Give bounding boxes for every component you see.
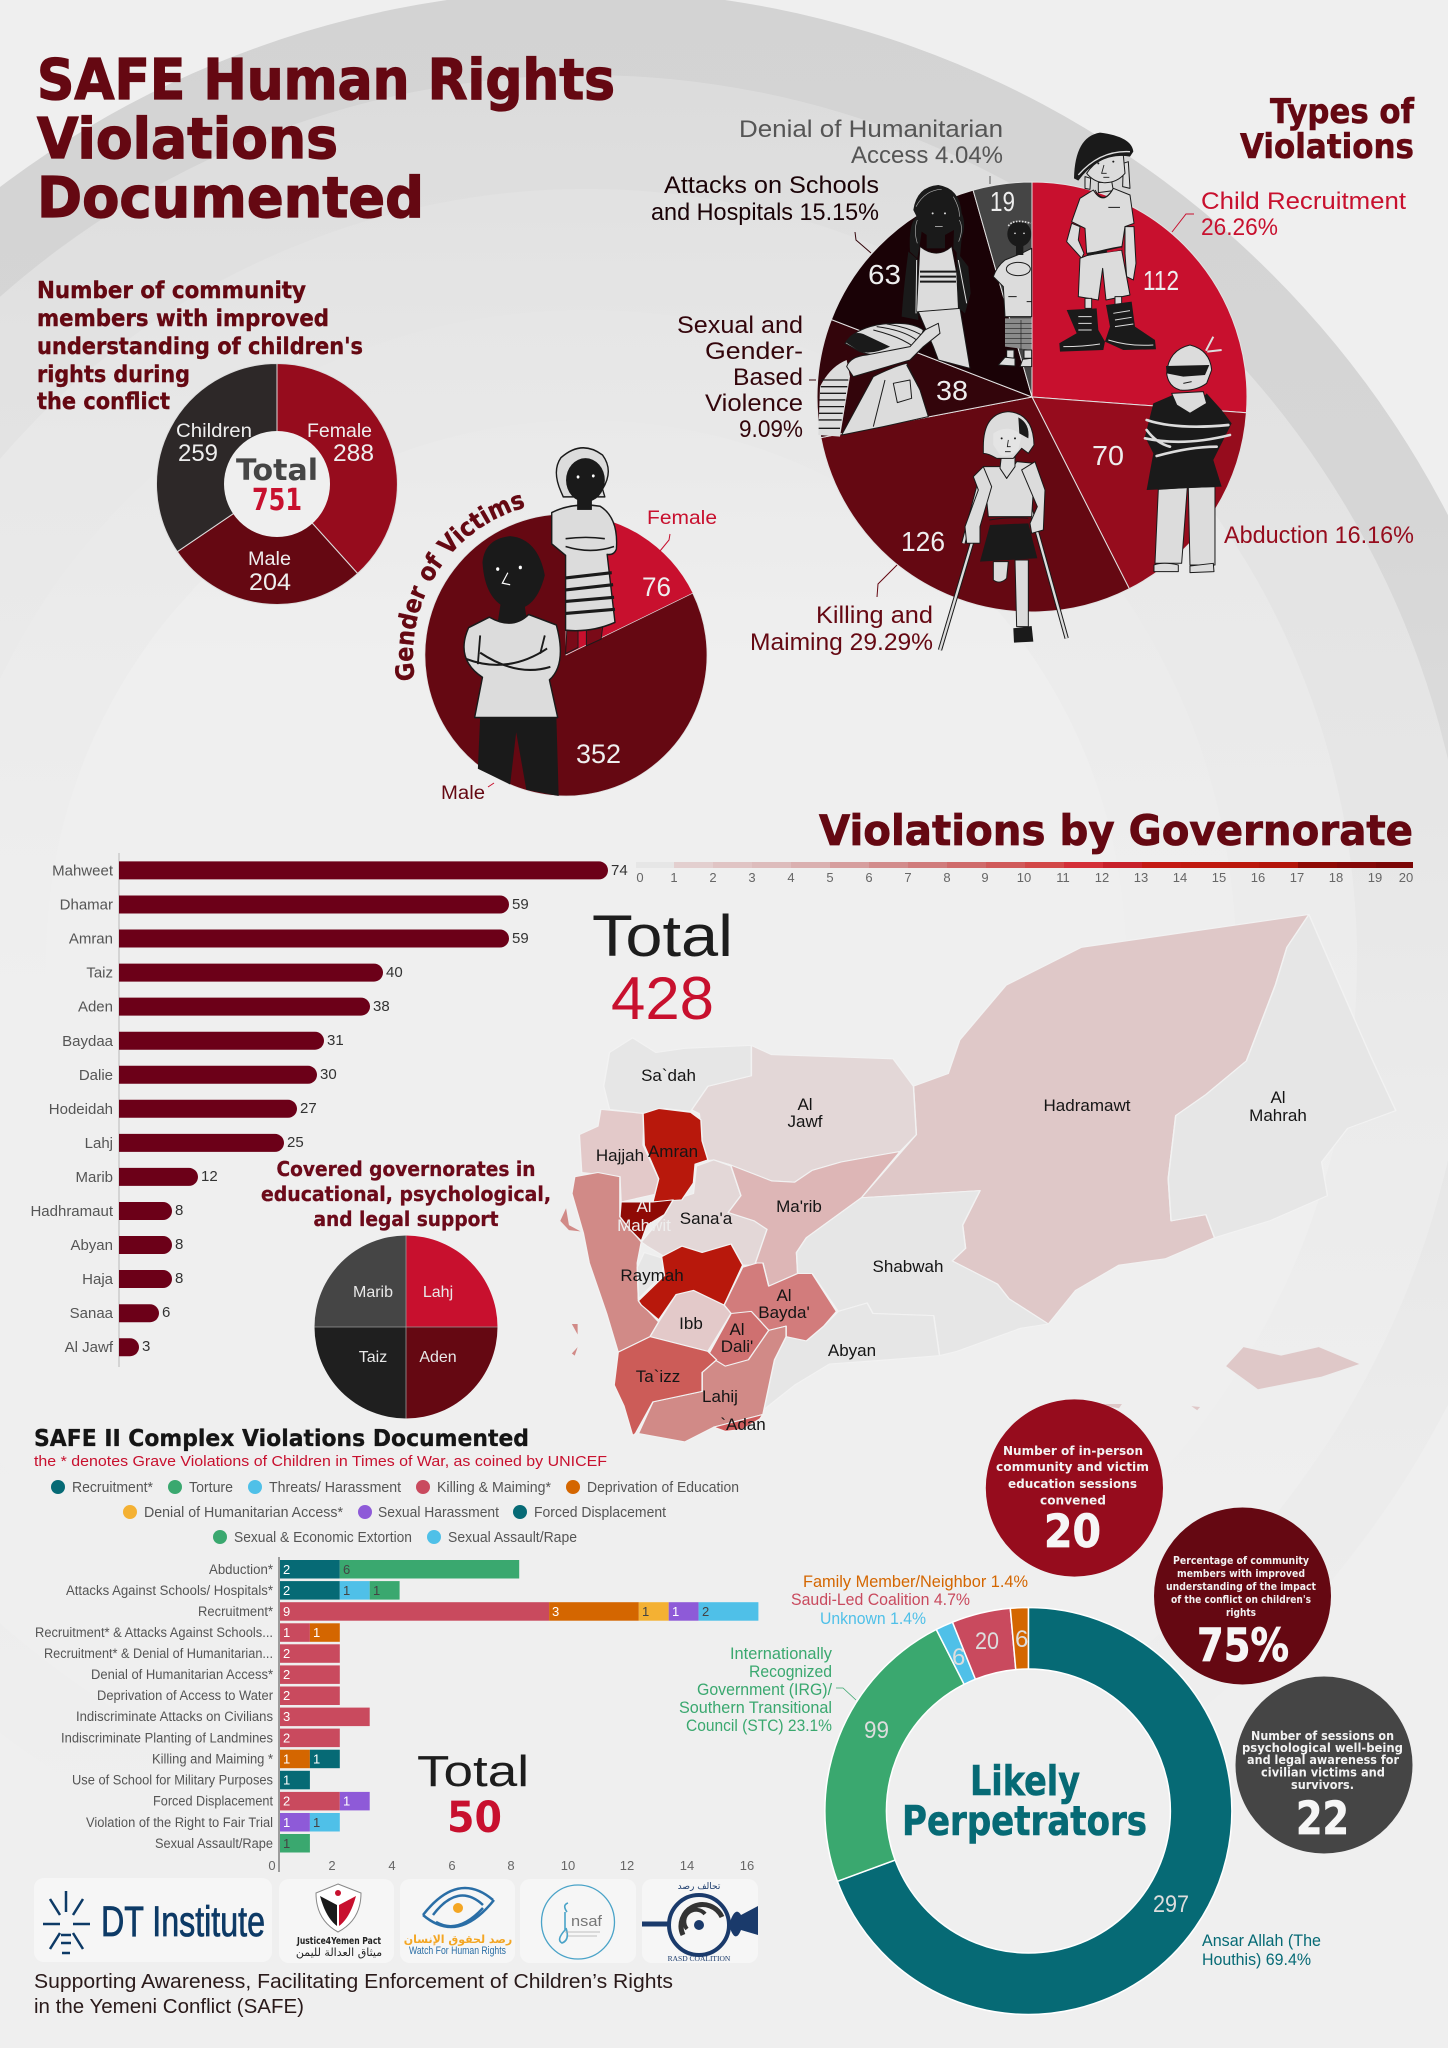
stacked bar chart: complex violations: Forced Displacement — [153, 1794, 273, 1808]
map of Yemen: Amran — [648, 1142, 698, 1161]
stat circle: improved understanding: 75% — [1197, 1619, 1289, 1672]
map legend: 15 — [1212, 870, 1226, 885]
stacked bar chart: complex violations: 1 — [313, 1752, 320, 1766]
stacked bar chart: complex violations: 1 — [313, 1625, 320, 1640]
label: denial of humanitarian access — [739, 116, 1003, 184]
map legend: 7 — [904, 870, 912, 885]
stat circle: improved understanding: understanding of the impact — [1166, 1580, 1316, 1593]
pie chart: covered governorates: Taiz — [359, 1349, 387, 1366]
legend: complex violations: Recruitment* — [72, 1479, 153, 1496]
footer project name — [34, 1971, 673, 2018]
icon: blindfolded boy — [1145, 337, 1232, 573]
heading: community members — [37, 278, 363, 415]
stacked bar chart: complex violations: Indiscriminate Attacks on Civilians — [76, 1709, 273, 1724]
total violations by governorate — [592, 904, 733, 1032]
stacked bar chart: complex violations: 1 — [283, 1752, 290, 1766]
bar chart: violations by governorate: 27 — [300, 1100, 317, 1117]
label: attacks on schools: Attacks on Schools — [664, 172, 879, 199]
map legend: 2 — [709, 870, 717, 885]
map of Yemen: Al — [636, 1197, 652, 1216]
stacked bar chart: complex violations: 14 — [680, 1858, 694, 1873]
heading: SAFE II complex violations — [34, 1426, 607, 1470]
stat circle: in-person sessions — [986, 1399, 1163, 1577]
map of Yemen: Sana'a — [680, 1209, 733, 1228]
pie chart: covered governorates: Marib — [353, 1284, 393, 1301]
logo: Insaf — [520, 1879, 636, 1963]
bar chart: violations by governorate: Lahj — [85, 1135, 113, 1152]
donut chart: community members: 288 — [333, 440, 374, 467]
stacked bar chart: complex violations: 9 — [283, 1604, 290, 1619]
perpetrator labels: Recognized — [749, 1662, 832, 1681]
stacked bar chart: complex violations: 2 — [283, 1646, 290, 1661]
heading: violations by governorate: Violations by Governorate — [819, 806, 1413, 855]
stacked bar chart: complex violations — [35, 1557, 758, 1873]
legend: complex violations: Threats/ Harassment — [269, 1479, 402, 1496]
logo: Justice4Yemen Pact — [279, 1879, 394, 1963]
heading: community members: understanding of children's — [37, 334, 363, 360]
perpetrator labels: Southern Transitional — [679, 1698, 832, 1717]
logo: RASD coalition: تحالف رصد — [678, 1882, 721, 1892]
total complex violations: Total — [417, 1747, 529, 1796]
heading: SAFE II complex violations: SAFE II Complex Violations Documented — [34, 1426, 529, 1452]
donut chart: likely perpetrators: Perpetrators — [902, 1797, 1147, 1845]
label: denial of humanitarian access: Denial of Humanitarian — [739, 116, 1003, 143]
heading: covered governorates — [261, 1157, 551, 1231]
stacked bar chart: complex violations: 0 — [268, 1858, 276, 1873]
legend: complex violations: Sexual Assault/Rape — [448, 1529, 577, 1546]
bar chart: violations by governorate: Taiz — [86, 964, 113, 982]
stat circle: in-person sessions: convened — [1040, 1493, 1106, 1508]
perpetrator labels: Government (IRG)/ — [697, 1680, 832, 1699]
icon: girl on crutches — [940, 412, 1067, 650]
stacked bar chart: complex violations: 4 — [388, 1858, 396, 1873]
bar chart: violations by governorate: 30 — [320, 1066, 337, 1083]
map of Yemen: Al — [776, 1286, 792, 1305]
stat circle: improved understanding: members with improved — [1177, 1567, 1305, 1580]
bar chart: violations by governorate: Hadhramaut — [30, 1203, 114, 1220]
bar chart: violations by governorate: Haja — [82, 1271, 114, 1288]
map of Yemen: Al — [1270, 1088, 1286, 1107]
bar chart: violations by governorate: 74 — [611, 862, 628, 879]
bar chart: violations by governorate: Baydaa — [62, 1033, 114, 1050]
map legend: 19 — [1368, 870, 1382, 885]
bar chart: violations by governorate: 38 — [373, 998, 390, 1015]
logo: RASD coalition — [642, 1879, 758, 1963]
stat circle: psychological sessions: and legal awareness for — [1247, 1753, 1399, 1767]
map legend: 13 — [1134, 870, 1148, 885]
bar chart: violations by governorate: 12 — [201, 1168, 218, 1185]
title: Violations — [37, 107, 338, 172]
map of Yemen — [560, 914, 1396, 1442]
stacked bar chart: complex violations: 1 — [283, 1836, 290, 1851]
donut chart: likely perpetrators: Likely — [970, 1757, 1080, 1805]
label: killing and maiming: Maiming 29.29% — [750, 629, 933, 656]
pie chart: types of violations: 63 — [868, 259, 901, 290]
bar chart: violations by governorate: Sanaa — [70, 1305, 114, 1322]
stacked bar chart: complex violations: Killing and Maiming * — [152, 1752, 274, 1766]
label: killing and maiming: Killing and — [816, 602, 933, 629]
footer project name: Supporting Awareness, Facilitating Enforcement of Children’s Rights — [34, 1971, 673, 1993]
heading: community members: the conflict — [37, 389, 170, 415]
donut chart: community members: 204 — [249, 569, 291, 596]
stacked bar chart: complex violations: 6 — [343, 1562, 350, 1577]
stacked bar chart: complex violations: Use of School for Military Purposes — [72, 1772, 273, 1788]
heading: community members: rights during — [37, 362, 190, 388]
map legend: 20 — [1399, 870, 1413, 885]
map of Yemen: Jawf — [788, 1112, 823, 1131]
legend: complex violations: Forced Displacement — [534, 1504, 667, 1521]
stacked bar chart: complex violations: 1 — [343, 1583, 350, 1598]
map of Yemen: Raymah — [620, 1266, 684, 1285]
donut chart: likely perpetrators: 20 — [975, 1628, 999, 1655]
donut chart: community members: Total — [236, 453, 318, 487]
map legend: 4 — [787, 870, 795, 885]
label: sexual and gender-based violence: Violence — [705, 390, 803, 417]
legend: complex violations: Sexual & Economic Extortion — [234, 1529, 412, 1546]
map of Yemen: Mahwit — [617, 1216, 671, 1235]
map legend: 5 — [826, 870, 834, 885]
stat circle: in-person sessions: education sessions — [1008, 1476, 1137, 1491]
perpetrator labels: Council (STC) 23.1% — [686, 1716, 832, 1735]
stat circle: psychological sessions: survivors. — [1291, 1778, 1354, 1792]
icon: girl with braids — [902, 185, 971, 368]
logo: Watch For Human Rights: رصد لحقوق الإنسان — [404, 1933, 512, 1946]
logo: Insaf: nsaf — [571, 1913, 603, 1930]
map of Yemen: Ibb — [679, 1314, 703, 1333]
pie chart: types of violations: 126 — [901, 526, 945, 557]
label: child recruitment: 26.26% — [1201, 214, 1278, 241]
map legend: 12 — [1095, 870, 1109, 885]
donut chart: likely perpetrators: 99 — [864, 1717, 889, 1744]
map legend: 10 — [1017, 870, 1031, 885]
stacked bar chart: complex violations: 2 — [283, 1583, 290, 1598]
label: sexual and gender-based violence — [677, 312, 816, 443]
donut chart: community members: 259 — [178, 440, 218, 467]
stacked bar chart: complex violations: 8 — [507, 1858, 515, 1873]
bar chart: violations by governorate: Aden — [78, 998, 113, 1016]
perpetrator labels: Internationally — [730, 1644, 832, 1663]
total complex violations — [417, 1747, 529, 1843]
pie chart: gender of victims: Female — [647, 508, 717, 529]
stat circle: improved understanding: Percentage of community — [1173, 1554, 1309, 1567]
legend: complex violations: Deprivation of Education — [587, 1479, 739, 1496]
stat circle: improved understanding: of the conflict on children's — [1171, 1593, 1311, 1606]
stacked bar chart: complex violations: Indiscriminate Planting of Landmines — [61, 1730, 273, 1746]
stacked bar chart: complex violations: Sexual Assault/Rape — [155, 1836, 273, 1851]
map of Yemen: Ma'rib — [776, 1197, 822, 1216]
stat circle: in-person sessions: 20 — [1044, 1505, 1101, 1558]
label: denial of humanitarian access: Access 4.04% — [851, 142, 1003, 169]
stacked bar chart: complex violations: 16 — [740, 1858, 754, 1873]
map of Yemen: Hajjah — [596, 1146, 644, 1165]
stacked bar chart: complex violations: 2 — [283, 1688, 290, 1703]
pie chart: gender of victims: Male — [441, 783, 485, 804]
bar chart: violations by governorate: 3 — [142, 1338, 150, 1355]
heading: types of violations — [1240, 92, 1415, 167]
logo: DT Institute — [34, 1878, 272, 1962]
bar chart: violations by governorate: Marib — [75, 1169, 113, 1186]
map legend: 6 — [865, 870, 873, 885]
perpetrator labels: Saudi-Led Coalition 4.7% — [791, 1590, 970, 1609]
stacked bar chart: complex violations: 3 — [283, 1709, 290, 1724]
legend: complex violations: Denial of Humanitarian Access* — [144, 1504, 343, 1521]
bar chart: violations by governorate: 31 — [327, 1032, 344, 1049]
stacked bar chart: complex violations: 2 — [702, 1604, 709, 1619]
heading: types of violations: Types of — [1270, 92, 1415, 132]
stacked bar chart: complex violations: 6 — [448, 1858, 456, 1873]
map of Yemen: Bayda' — [758, 1303, 810, 1322]
heading: SAFE II complex violations: the * denotes Grave Violations of Children in Times of War, as coined by UNICEF — [34, 1453, 607, 1470]
stacked bar chart: complex violations: Deprivation of Access to Water — [97, 1688, 273, 1703]
donut chart: likely perpetrators: 297 — [1153, 1891, 1189, 1918]
stacked bar chart: complex violations: 1 — [283, 1815, 290, 1830]
stacked bar chart: complex violations: Violation of the Right to Fair Trial — [86, 1815, 273, 1830]
total violations by governorate: Total — [592, 904, 733, 969]
icon: female figure — [552, 448, 617, 654]
stacked bar chart: complex violations: 1 — [672, 1604, 679, 1619]
legend: complex violations — [51, 1479, 739, 1546]
pie chart: covered governorates — [314, 1236, 498, 1418]
stacked bar chart: complex violations: 2 — [283, 1730, 290, 1746]
stacked bar chart: complex violations: Recruitment* & Denial of Humanitarian... — [44, 1646, 273, 1661]
icon: crouching girl — [818, 323, 940, 437]
bar chart: violations by governorate: Amran — [69, 930, 113, 948]
logo: Justice4Yemen Pact: ميثاق العدالة لليمن — [296, 1946, 382, 1959]
stat circle: in-person sessions: Number of in-person — [1003, 1443, 1143, 1458]
stacked bar chart: complex violations: 1 — [283, 1772, 290, 1788]
map of Yemen: Dali' — [721, 1337, 753, 1356]
map legend: 0 — [636, 870, 644, 885]
bar chart: violations by governorate: 8 — [175, 1236, 183, 1253]
stat circle: psychological sessions — [1236, 1676, 1412, 1854]
label: killing and maiming — [750, 565, 933, 656]
map of Yemen: Abyan — [828, 1341, 876, 1360]
label: sexual and gender-based violence: Based — [733, 364, 803, 391]
map of Yemen: Hadramawt — [1044, 1096, 1131, 1115]
bar chart: violations by governorate: 6 — [162, 1304, 170, 1321]
logo: Justice4Yemen Pact: Justice4Yemen Pact — [296, 1936, 381, 1947]
label: abduction: Abduction 16.16% — [1224, 522, 1414, 549]
donut chart: community members: Male — [248, 549, 291, 570]
stacked bar chart: complex violations: 12 — [620, 1858, 634, 1873]
stacked bar chart: complex violations: 1 — [313, 1815, 320, 1830]
logo: RASD coalition: RASD COALITION — [668, 1954, 731, 1963]
pie chart: types of violations — [817, 133, 1247, 650]
bar chart: violations by governorate: Hodeidah — [49, 1101, 113, 1118]
bar chart: violations by governorate: Dalie — [79, 1067, 113, 1084]
stacked bar chart: complex violations: 2 — [328, 1858, 336, 1873]
label: child recruitment — [1172, 188, 1406, 241]
map legend: 16 — [1251, 870, 1265, 885]
stacked bar chart: complex violations: 2 — [283, 1794, 290, 1808]
donut chart: community members: Female — [307, 421, 372, 442]
total complex violations: 50 — [447, 1793, 502, 1843]
donut chart: likely perpetrators: 6 — [1015, 1626, 1028, 1653]
stacked bar chart: complex violations: 1 — [343, 1794, 350, 1808]
map legend: 11 — [1056, 870, 1070, 885]
pie chart: covered governorates: Lahj — [423, 1284, 453, 1301]
map legend: 18 — [1329, 870, 1343, 885]
logo: Watch For Human Rights — [400, 1879, 515, 1963]
bar chart: violations by governorate: Al Jawf — [65, 1339, 114, 1356]
legend: complex violations: Sexual Harassment — [378, 1504, 500, 1521]
label: sexual and gender-based violence: Gender- — [705, 338, 803, 365]
bar chart: violations by governorate: 25 — [287, 1134, 304, 1151]
stacked bar chart: complex violations: Abduction* — [209, 1562, 274, 1577]
pie chart: covered governorates: Aden — [419, 1349, 457, 1366]
donut chart: likely perpetrators: 6 — [952, 1644, 965, 1671]
stacked bar chart: complex violations: 2 — [283, 1562, 290, 1577]
map legend — [636, 862, 1413, 885]
stacked bar chart: complex violations: 3 — [552, 1604, 559, 1619]
footer project name: in the Yemeni Conflict (SAFE) — [34, 1996, 304, 2018]
total violations by governorate: 428 — [611, 965, 714, 1032]
donut chart: community members: Children — [176, 421, 252, 442]
heading: covered governorates: and legal support — [314, 1207, 499, 1231]
stacked bar chart: complex violations: Recruitment* — [198, 1604, 274, 1619]
stacked bar chart: complex violations: 10 — [561, 1858, 575, 1873]
perpetrator labels — [679, 1572, 1321, 1969]
heading: community members: members with improved — [37, 306, 329, 332]
icon: small child — [993, 221, 1032, 367]
stat circle: psychological sessions: Number of sessions on — [1251, 1729, 1394, 1743]
legend: complex violations: Torture — [189, 1479, 233, 1496]
heading: types of violations: Violations — [1240, 127, 1414, 167]
bar chart: violations by governorate: Abyan — [70, 1237, 113, 1254]
stacked bar chart: complex violations: 2 — [283, 1667, 290, 1682]
label: sexual and gender-based violence: 9.09% — [739, 416, 803, 443]
map of Yemen: `Adan — [720, 1415, 766, 1434]
stat circle: psychological sessions: psychological well-being — [1242, 1741, 1403, 1755]
donut chart: community members: 751 — [252, 483, 302, 518]
bar chart: violations by governorate: 59 — [512, 930, 529, 947]
bar chart: violations by governorate: 59 — [512, 896, 529, 913]
map legend: 14 — [1173, 870, 1187, 885]
map of Yemen: Shabwah — [873, 1257, 943, 1276]
stat circle: improved understanding — [1154, 1508, 1331, 1684]
bar chart: violations by governorate: 8 — [175, 1270, 183, 1287]
bar chart: violations by governorate: 8 — [175, 1202, 183, 1219]
bar chart: violations by governorate: Mahweet — [52, 862, 114, 880]
icon: child soldier — [1059, 133, 1156, 352]
heading: community members: Number of community — [37, 278, 306, 304]
legend: complex violations: Killing & Maiming* — [437, 1479, 551, 1496]
stat circle: improved understanding: rights — [1226, 1606, 1256, 1619]
perpetrator labels: Ansar Allah (The — [1202, 1931, 1321, 1950]
label: attacks on schools: and Hospitals 15.15% — [651, 199, 879, 226]
donut chart: likely perpetrators — [825, 1608, 1232, 2014]
map of Yemen: Mahrah — [1249, 1106, 1307, 1125]
stat circle: psychological sessions: 22 — [1296, 1792, 1349, 1845]
pie chart: gender of victims — [394, 447, 717, 804]
perpetrator labels: Unknown 1.4% — [820, 1609, 926, 1628]
heading: covered governorates: educational, psychological, — [261, 1182, 551, 1206]
stacked bar chart: complex violations: Recruitment* & Attacks Against Schools... — [35, 1625, 273, 1640]
label: child recruitment: Child Recruitment — [1201, 188, 1406, 215]
pie chart: types of violations: 112 — [1143, 265, 1179, 296]
perpetrator labels: Family Member/Neighbor 1.4% — [803, 1572, 1028, 1591]
stacked bar chart: complex violations: 1 — [373, 1583, 380, 1598]
perpetrator labels: Houthis) 69.4% — [1202, 1950, 1311, 1969]
title — [37, 48, 615, 231]
map of Yemen: Sa`dah — [641, 1066, 696, 1085]
bar chart: violations by governorate: 40 — [386, 964, 403, 981]
label: sexual and gender-based violence: Sexual and — [677, 312, 803, 339]
map legend: 9 — [981, 870, 989, 885]
pie chart: gender of victims: 76 — [642, 572, 671, 602]
map of Yemen: Lahij — [702, 1387, 738, 1406]
logo: DT Institute: DT Institute — [101, 1898, 265, 1946]
map of Yemen: Al — [797, 1095, 813, 1114]
map legend: 1 — [670, 870, 678, 885]
title: Documented — [37, 166, 424, 231]
icon: male figure — [464, 536, 560, 796]
stacked bar chart: complex violations: 1 — [642, 1604, 649, 1619]
stacked bar chart: complex violations: Denial of Humanitarian Access* — [91, 1667, 274, 1682]
stat circle: psychological sessions: civilian victims and — [1261, 1766, 1385, 1780]
stacked bar chart: complex violations: 1 — [283, 1625, 290, 1640]
map of Yemen: Ta`izz — [636, 1367, 680, 1386]
map legend: 17 — [1290, 870, 1304, 885]
pie chart: types of violations: 38 — [936, 375, 968, 406]
chart title: gender of victims: Gender of Victims — [394, 494, 524, 680]
stacked bar chart: complex violations: Attacks Against Schools/ Hospitals* — [66, 1583, 274, 1598]
map of Yemen: Al — [729, 1320, 745, 1339]
map legend: 3 — [748, 870, 756, 885]
pie chart: types of violations: 70 — [1092, 440, 1124, 471]
heading: covered governorates: Covered governorates in — [276, 1157, 536, 1181]
map legend: 8 — [943, 870, 951, 885]
bar chart: violations by governorate — [30, 853, 628, 1367]
pie chart: types of violations: 19 — [990, 186, 1015, 217]
donut chart: community members — [156, 363, 397, 604]
pie chart: gender of victims: 352 — [576, 739, 621, 769]
bar chart: violations by governorate: Dhamar — [60, 896, 113, 914]
logo: Watch For Human Rights: Watch For Human Rights — [409, 1945, 506, 1957]
title: SAFE Human Rights — [37, 48, 615, 113]
label: attacks on schools — [651, 172, 879, 253]
stat circle: in-person sessions: community and victim — [996, 1459, 1149, 1474]
